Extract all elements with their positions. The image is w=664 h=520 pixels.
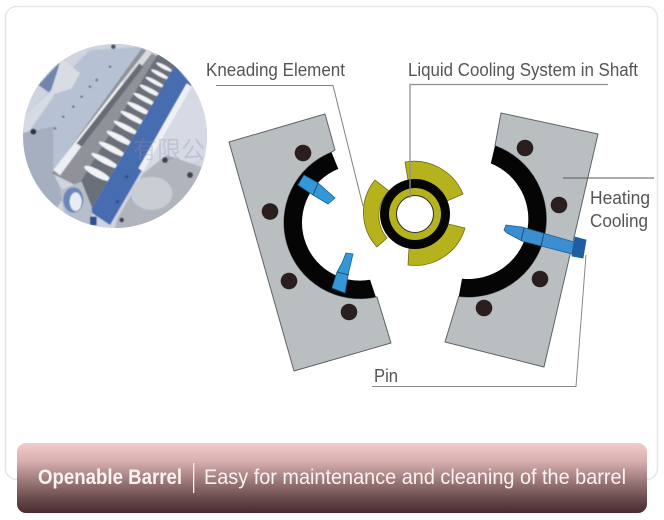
pin: right [504, 225, 586, 258]
black liner arc: left [284, 152, 376, 299]
pin: lower left [332, 253, 353, 293]
leader line: heating cooling [563, 177, 654, 179]
leader line: pin [372, 255, 586, 386]
banner divider [193, 463, 194, 493]
bolt holes: right [476, 140, 567, 316]
black shaft ring [380, 179, 450, 249]
label: liquid cooling system: Liquid Cooling System in Shaft [408, 60, 638, 80]
banner description: Easy for maintenance and cleaning of the barrel [204, 466, 626, 489]
label: heating cooling [590, 188, 650, 231]
label: kneading element: Kneading Element [206, 60, 345, 80]
yellow inner ring [389, 188, 441, 240]
leader line: liquid cooling [410, 84, 608, 198]
barrel block: left [229, 114, 391, 371]
watermark text: 有限公 [133, 137, 205, 164]
shaft with kneading element [363, 161, 465, 265]
left barrel half [229, 114, 391, 371]
banner [17, 443, 647, 513]
cooling bore [396, 196, 434, 232]
black liner arc: right [459, 146, 546, 297]
barrel block: right [445, 113, 598, 367]
label: heating cooling: Cooling [590, 211, 648, 231]
pin: upper left [298, 175, 335, 204]
label: heating cooling: Heating [590, 188, 650, 208]
label: pin: Pin [374, 366, 398, 386]
leader line: kneading element [216, 86, 363, 206]
banner heading: Openable Barrel [38, 466, 182, 489]
photo: extruder barrel opened [23, 44, 207, 228]
bolt holes: left [262, 145, 357, 320]
right barrel half [445, 113, 598, 367]
yellow kneading lobes [363, 161, 465, 265]
